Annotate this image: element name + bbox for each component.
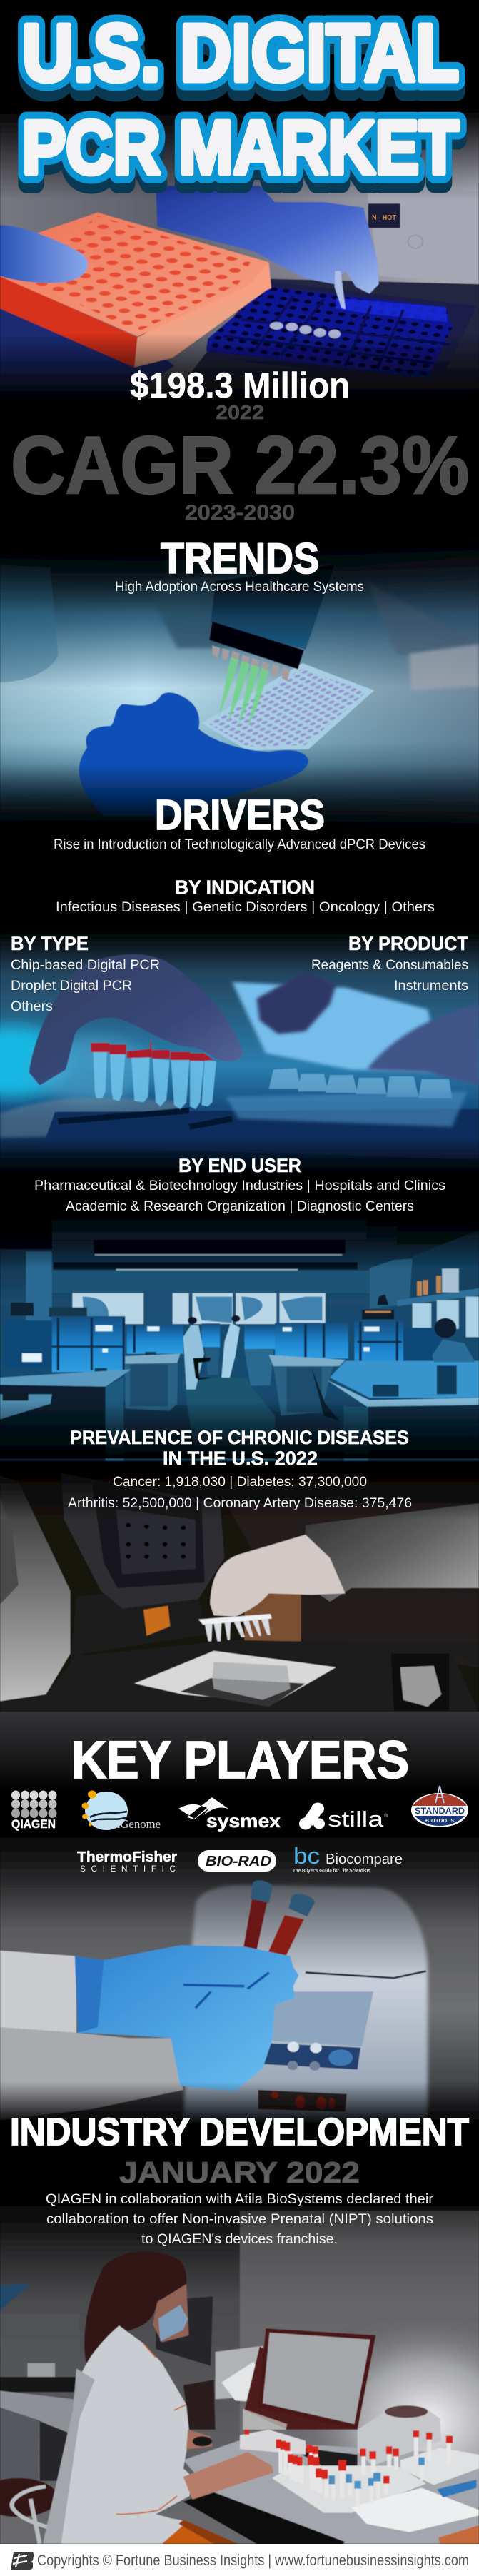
logo: Biocompare: Biocompare xyxy=(326,1852,403,1867)
title xyxy=(22,8,459,200)
photo: hands loading PCR plate xyxy=(0,109,479,429)
logo: stilla: stilla xyxy=(328,1807,384,1832)
logo: Thermo Fisher Scientific: SCIENTIFIC xyxy=(80,1864,176,1874)
gradient behind key players xyxy=(0,1712,479,1792)
by indication segment xyxy=(56,877,435,915)
type item 3: Others xyxy=(11,999,53,1014)
market value year: 2022 xyxy=(216,401,264,423)
end user line 2: Academic & Research Organization | Diagnostic Centers xyxy=(66,1199,414,1214)
end user line 1: Pharmaceutical & Biotechnology Industries | Hospitals and Clinics xyxy=(34,1178,445,1193)
footer bar xyxy=(0,2544,479,2576)
by indication heading: BY INDICATION xyxy=(175,877,315,898)
photo: gloved hands holding blood tubes xyxy=(0,1836,479,2153)
development description xyxy=(46,2191,434,2247)
CAGR period: 2023-2030 xyxy=(185,501,295,525)
drivers text: Rise in Introduction of Technologically Advanced dPCR Devices xyxy=(54,837,425,852)
logo: Biocompare: The Buyer's Guide for Life Scientists xyxy=(293,1867,370,1874)
logo: Standard BioTools xyxy=(411,1786,468,1827)
market value: $198.3 Million xyxy=(130,365,350,405)
logo: stilla: ® xyxy=(384,1813,388,1819)
logo: Standard BioTools: STANDARD xyxy=(415,1806,465,1816)
logo: stilla xyxy=(299,1803,388,1832)
type item 2: Droplet Digital PCR xyxy=(11,979,132,994)
photo: hand placing PCR tubes xyxy=(0,930,479,1176)
prevalence heading line 1: PREVALENCE OF CHRONIC DISEASES xyxy=(70,1427,409,1448)
trends heading: TRENDS xyxy=(161,535,319,582)
type item 1: Chip-based Digital PCR xyxy=(11,958,160,973)
photo: multichannel pipette and well plate xyxy=(0,537,479,860)
logo: Standard BioTools: BIOTOOLS xyxy=(425,1819,454,1824)
logo: sysmex xyxy=(178,1797,281,1832)
logo: QIAGEN xyxy=(11,1790,57,1831)
description line 3: to QIAGEN's devices franchise. xyxy=(141,2231,338,2247)
logo: PreciGenome xyxy=(81,1790,161,1831)
by product heading: BY PRODUCT xyxy=(348,933,468,954)
drivers heading: DRIVERS xyxy=(155,792,325,839)
by product segment xyxy=(311,933,468,994)
logo: sysmex: sysmex xyxy=(206,1810,281,1832)
by type heading: BY TYPE xyxy=(11,933,89,954)
logo: PreciGenome: PreciGenome xyxy=(96,1817,161,1831)
product item 1: Reagents & Consumables xyxy=(311,958,468,973)
title face xyxy=(22,8,459,190)
key players heading: KEY PLAYERS xyxy=(71,1730,409,1789)
logo: Bio-Rad: BIO-RAD xyxy=(206,1854,271,1869)
logo: Bio-Rad xyxy=(198,1850,276,1872)
logo: Thermo Fisher Scientific: ThermoFisher xyxy=(77,1849,177,1865)
title outline xyxy=(22,8,459,190)
prevalence figures line 1: Cancer: 1,918,030 | Diabetes: 37,300,000 xyxy=(113,1475,367,1490)
logo: Biocompare: bc xyxy=(293,1843,320,1869)
product item 2: Instruments xyxy=(394,979,468,994)
label on instrument: N - HOT xyxy=(372,214,396,222)
photo: lab technician at computer xyxy=(0,2141,479,2544)
by indication list: Infectious Diseases | Genetic Disorders | Oncology | Others xyxy=(56,900,435,915)
development date: JANUARY 2022 xyxy=(119,2156,360,2189)
logo: Thermo Fisher Scientific xyxy=(77,1849,177,1874)
description line 2: collaboration to offer Non-invasive Prenatal (NIPT) solutions xyxy=(46,2211,433,2227)
by end user heading: BY END USER xyxy=(178,1155,301,1176)
by type segment xyxy=(11,933,160,1014)
by end user segment xyxy=(34,1155,445,1214)
icon: Fortune Business Insights logo xyxy=(11,2552,34,2570)
description line 1: QIAGEN in collaboration with Atila BioSystems declared their xyxy=(46,2191,434,2207)
key player logos xyxy=(11,1786,468,1874)
photo: thermal cycler with tube strip xyxy=(0,1463,479,1777)
logo: QIAGEN: QIAGEN xyxy=(11,1817,56,1831)
prevalence figures line 2: Arthritis: 52,500,000 | Coronary Artery Disease: 375,476 xyxy=(68,1496,412,1511)
prevalence panel xyxy=(68,1427,412,1511)
prevalence heading line 2: IN THE U.S. 2022 xyxy=(163,1448,318,1469)
trends text: High Adoption Across Healthcare Systems xyxy=(115,580,364,595)
title shadow xyxy=(22,19,459,200)
photo: laboratory room xyxy=(0,1213,479,1461)
logo: Biocompare xyxy=(293,1843,403,1874)
